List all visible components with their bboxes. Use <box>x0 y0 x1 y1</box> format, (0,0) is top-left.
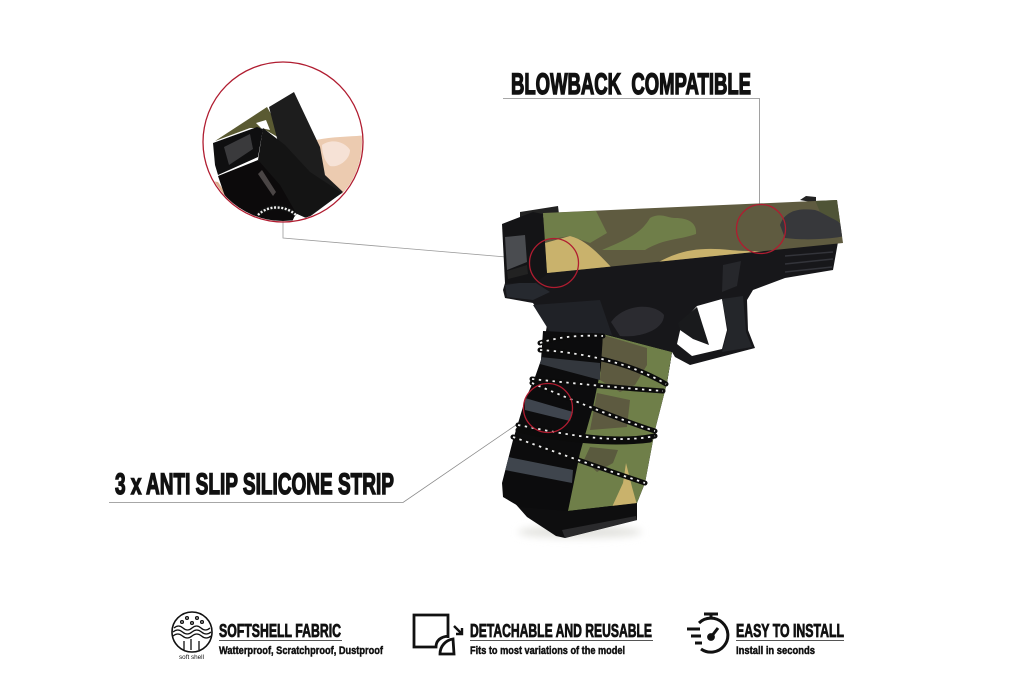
heading: blowback compatible: BLOWBACK COMPATIBLE <box>511 68 751 101</box>
magazine shadow <box>518 526 642 538</box>
finger left <box>214 182 232 202</box>
olive flap <box>215 107 276 141</box>
magazine base <box>512 500 637 538</box>
subtitle: Fits to most variations of the model <box>470 645 625 657</box>
feature: softshell fabric <box>172 612 383 661</box>
camo side <box>568 334 672 511</box>
bungee cord <box>294 214 297 217</box>
leader line: inset detail <box>283 220 506 257</box>
heading: anti slip silicone strip: 3 x ANTI SLIP SILICONE STRIP <box>115 468 394 501</box>
callout ring: slide <box>736 204 786 254</box>
rule <box>736 640 844 641</box>
callout ring: grip <box>524 384 572 432</box>
icon caption: soft shell <box>179 654 205 661</box>
subtitle: Install in seconds <box>736 645 815 657</box>
silicone strips <box>540 357 600 380</box>
bungee cords <box>513 336 666 483</box>
feature: easy to install <box>687 614 844 657</box>
inset photo: velcro strap detail <box>200 60 370 225</box>
camo slide <box>543 200 843 273</box>
trigger guard opening <box>677 299 727 356</box>
leader line: silicone strip <box>109 425 516 502</box>
pistol photo <box>500 196 846 538</box>
icon: softshell layers <box>172 612 212 652</box>
rail grooves <box>785 252 833 272</box>
feature: detachable and reusable <box>414 615 653 657</box>
leader line: blowback <box>503 98 760 206</box>
title: DETACHABLE AND REUSABLE <box>470 621 652 641</box>
rule <box>470 640 653 641</box>
subtitle: Watterproof, Scratchproof, Dustproof <box>219 645 383 657</box>
velcro strap <box>269 92 343 218</box>
icon: stopwatch <box>687 614 728 652</box>
pistol frame <box>503 242 838 383</box>
slide lock <box>722 261 741 292</box>
title: SOFTSHELL FABRIC <box>219 621 341 641</box>
slide end plate <box>213 127 263 175</box>
infographic canvas <box>109 61 844 659</box>
back plate <box>502 212 550 283</box>
rule <box>219 640 342 641</box>
title: EASY TO INSTALL <box>736 621 844 641</box>
glossy frame <box>218 160 296 224</box>
trigger <box>678 307 709 345</box>
sights <box>520 206 559 218</box>
grip sleeve <box>500 328 680 513</box>
callout ring: rear <box>530 238 578 288</box>
inset ring <box>203 62 363 222</box>
finger right <box>316 135 366 194</box>
icon: corner sleeve <box>414 615 462 654</box>
